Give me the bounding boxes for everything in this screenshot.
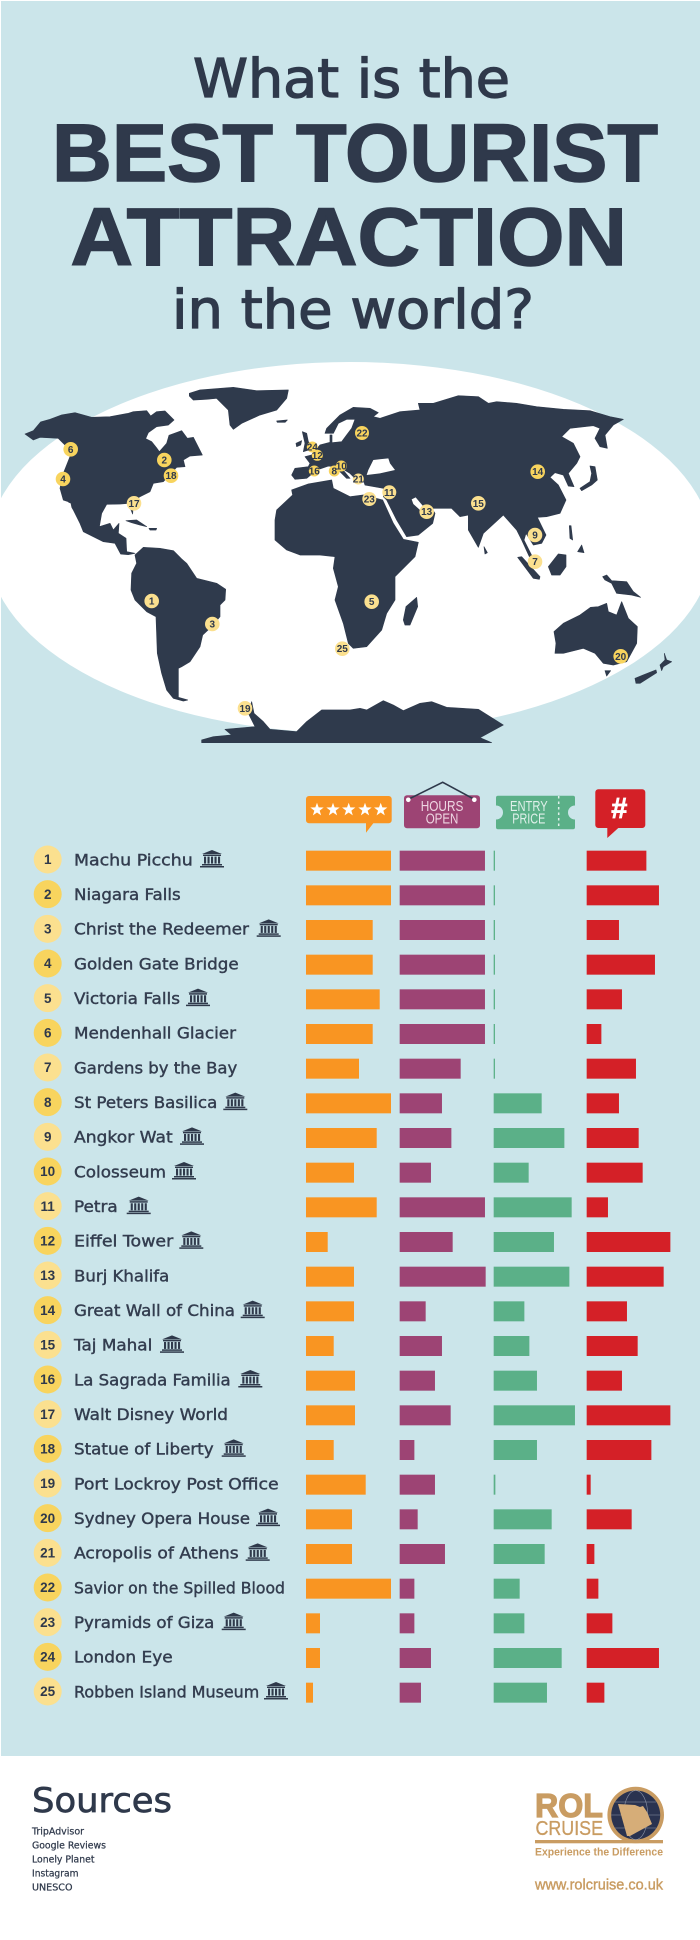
map location pins: 20 (615, 652, 627, 663)
North America (25, 411, 202, 555)
row 19: 19 (40, 1476, 55, 1491)
row 17 (34, 1400, 670, 1428)
Baja gulf (66, 502, 73, 519)
row 20 (34, 1504, 632, 1532)
row 19 (34, 1470, 591, 1498)
row 7: Gardens by the Bay (74, 1058, 237, 1077)
map location pins: 13 (421, 507, 433, 518)
UK and Ireland (302, 432, 312, 452)
map location pins: 10 (336, 462, 347, 472)
row 25: Robben Island Museum (74, 1682, 259, 1701)
map location pins: 5 (369, 597, 375, 608)
row 9: 9 (44, 1130, 51, 1144)
Greenland (189, 387, 288, 429)
Japan (580, 466, 597, 491)
row 7: 7 (44, 1060, 51, 1075)
row 20: 20 (40, 1511, 55, 1526)
row 14: Great Wall of China (74, 1301, 235, 1320)
row 6 (34, 1019, 601, 1047)
row 22: 22 (40, 1580, 55, 1595)
row 1: Machu Picchu (74, 850, 193, 869)
title: in the world? (172, 278, 534, 341)
map location pins: 3 (210, 620, 216, 630)
row 11 (34, 1192, 608, 1220)
world map panel (0, 362, 700, 743)
logo: ROL Cruise: ROL (535, 1787, 603, 1824)
row 9: Angkor Wat (74, 1128, 173, 1147)
map location pins: 24 (307, 442, 318, 454)
row 21: Acropolis of Athens (74, 1544, 239, 1563)
map location pins: 16 (309, 466, 320, 478)
row 12: Eiffel Tower (74, 1232, 174, 1251)
row 16: 16 (40, 1372, 56, 1387)
row 18 (34, 1435, 651, 1463)
row 8: St Peters Basilica (74, 1093, 217, 1112)
row 3 (34, 915, 619, 943)
row 20: Sydney Opera House (74, 1509, 250, 1528)
row 2: Niagara Falls (74, 885, 181, 904)
map location pins: 8 (332, 466, 338, 478)
map location pins: 12 (312, 451, 323, 462)
row 23: Pyramids of Giza (74, 1613, 214, 1632)
map location pins: 18 (165, 471, 177, 482)
title: What is the (193, 47, 510, 110)
row 21 (34, 1539, 594, 1567)
column header: entry price: ENTRY (510, 799, 548, 815)
row 23: 23 (40, 1615, 56, 1630)
row 12 (34, 1227, 670, 1255)
column header: hashtag: # (611, 793, 627, 825)
map location pins: 21 (353, 474, 364, 486)
row 10: Colosseum (74, 1162, 166, 1181)
row 16 (34, 1366, 622, 1394)
row 1 (34, 846, 646, 874)
row 4: 4 (44, 956, 52, 971)
row 11: 11 (41, 1199, 55, 1214)
column header: entry price (496, 796, 575, 829)
column header: hashtag (595, 789, 645, 838)
row 3: Christ the Redeemer (74, 920, 249, 939)
row 15: 15 (40, 1338, 56, 1352)
map location pins: 9 (532, 530, 538, 542)
map location pins: 11 (384, 488, 395, 499)
map landmasses (25, 387, 672, 743)
row 2 (34, 880, 659, 908)
row 17: 17 (40, 1407, 55, 1422)
Eurasia (292, 396, 623, 557)
row 21: 21 (40, 1546, 56, 1560)
map location pins: 19 (239, 704, 251, 715)
row 13: 13 (40, 1268, 56, 1283)
row 24: 24 (40, 1650, 56, 1664)
row 10 (34, 1158, 643, 1186)
Persian Gulf (412, 497, 425, 510)
row 13: Burj Khalifa (74, 1266, 169, 1285)
map location pins: 1 (149, 596, 155, 608)
New Zealand (635, 670, 657, 683)
map location pins: 4 (60, 474, 66, 486)
row 16: La Sagrada Familia (74, 1370, 231, 1389)
row 13 (34, 1262, 664, 1290)
column header: hours open (404, 782, 480, 828)
row 6: Mendenhall Glacier (74, 1024, 236, 1043)
row 24: London Eye (74, 1648, 173, 1667)
title: BEST TOURIST (52, 108, 658, 199)
logo: ROL Cruise: CRUISE (536, 1818, 603, 1840)
sources list: UNESCO (32, 1882, 73, 1894)
title: ATTRACTION (70, 192, 627, 283)
row 18: 18 (40, 1442, 56, 1456)
row 6: 6 (44, 1026, 52, 1040)
row 22 (34, 1574, 598, 1602)
Sri Lanka (484, 547, 487, 554)
row 18: Statue of Liberty (74, 1440, 214, 1459)
row 25 (34, 1678, 604, 1706)
ranking table (34, 846, 670, 1706)
row 12: 12 (40, 1234, 55, 1248)
Cuba and Hispaniola (126, 520, 147, 527)
row 25: 25 (40, 1684, 56, 1699)
row 24 (34, 1643, 659, 1671)
sources heading: Sources (32, 1781, 172, 1821)
column header: star rating (306, 796, 392, 833)
Africa (275, 480, 418, 648)
row 22: Savior on the Spilled Blood (74, 1578, 285, 1597)
logo: ROL Cruise: www.rolcruise.co.uk (534, 1876, 663, 1894)
row 4 (34, 950, 655, 978)
Sumatra (518, 557, 540, 579)
map location pins: 17 (128, 499, 140, 510)
Iceland (277, 420, 287, 422)
map location pins: 7 (532, 557, 538, 568)
row 7 (34, 1054, 636, 1082)
sources list: Lonely Planet (32, 1854, 95, 1866)
row 5: Victoria Falls (74, 989, 180, 1008)
row 23 (34, 1608, 612, 1636)
sources list: Google Reviews (32, 1840, 106, 1852)
map location pins: 14 (532, 467, 544, 478)
Black Sea (367, 458, 395, 475)
row 14: 14 (40, 1303, 56, 1318)
map location pins: 6 (68, 445, 74, 456)
logo: ROL Cruise (534, 1787, 664, 1894)
row 8 (34, 1088, 619, 1116)
row 2: 2 (44, 887, 51, 902)
sources list: TripAdvisor (31, 1826, 85, 1838)
row 15 (34, 1331, 638, 1359)
South America (131, 547, 226, 701)
sources list: Instagram (32, 1868, 78, 1880)
Antarctica (202, 701, 503, 743)
row 15: Taj Mahal (73, 1336, 152, 1355)
Australia (554, 602, 637, 665)
row 3: 3 (44, 922, 52, 936)
map location pins: 25 (337, 644, 348, 655)
row 19: Port Lockroy Post Office (74, 1474, 279, 1493)
map location pins: 22 (356, 428, 368, 440)
column header: entry price: PRICE (512, 812, 546, 828)
row 14 (34, 1296, 627, 1324)
Philippines (569, 526, 573, 540)
logo: ROL Cruise: Experience the Difference (535, 1846, 663, 1858)
row 17: Walt Disney World (74, 1405, 228, 1424)
row 11: Petra (74, 1197, 118, 1216)
map location pins: 15 (473, 499, 484, 510)
sources list (31, 1826, 106, 1894)
row 5: 5 (44, 991, 52, 1006)
map location pins: 2 (162, 456, 168, 466)
row 10: 10 (40, 1164, 55, 1179)
row 5 (34, 984, 622, 1012)
row 9 (34, 1123, 639, 1151)
Madagascar (403, 597, 418, 625)
Tasmania (605, 671, 611, 676)
column header: hours open: HOURS (421, 799, 463, 815)
title (52, 47, 658, 341)
map location pins (56, 426, 628, 716)
column header: hours open: OPEN (426, 812, 458, 828)
row 8: 8 (44, 1095, 52, 1110)
row 4: Golden Gate Bridge (74, 954, 239, 973)
New Guinea (603, 575, 641, 597)
Borneo (548, 554, 566, 575)
row 1: 1 (44, 852, 52, 867)
map location pins: 23 (364, 494, 375, 506)
